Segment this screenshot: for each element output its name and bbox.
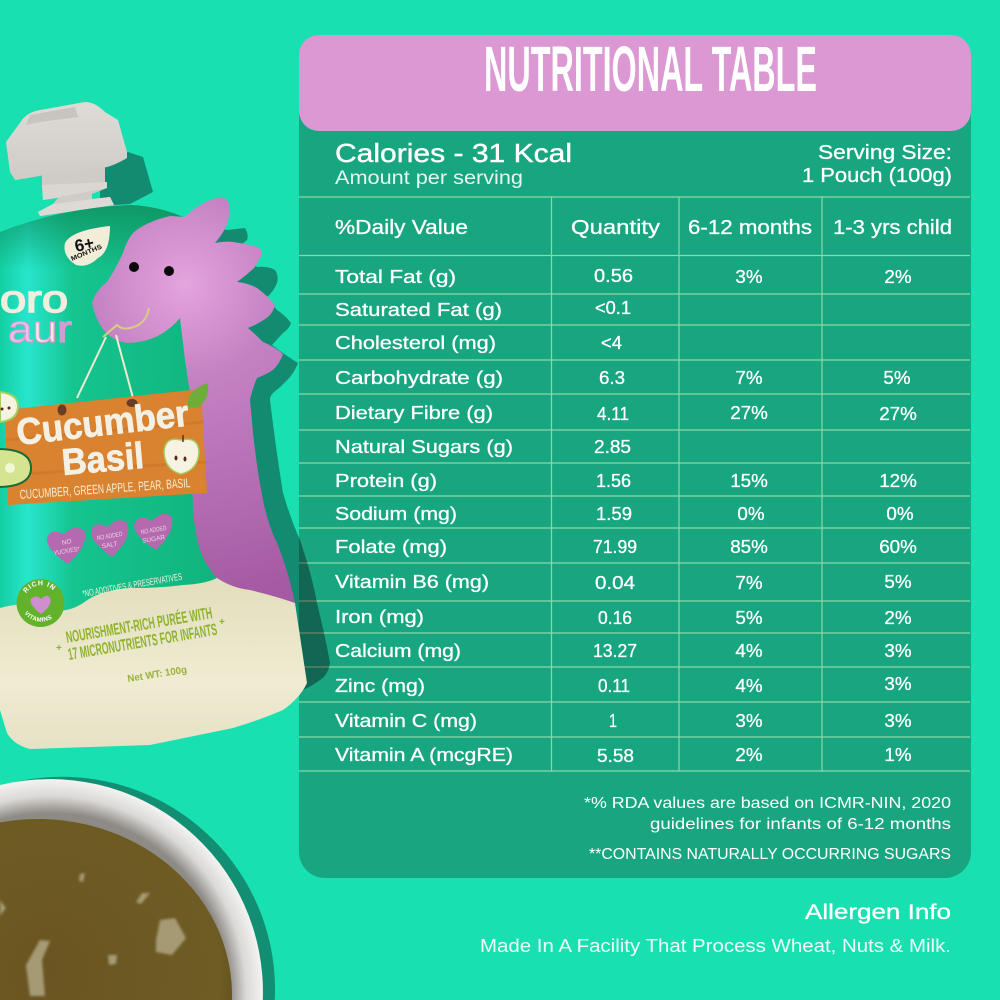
- quantity column: <0.1: [595, 297, 631, 318]
- bowl of puree: [0, 777, 275, 1000]
- column headers: Quantity: [571, 217, 660, 239]
- nutrient names: Vitamin A (mcgRE): [335, 744, 513, 765]
- ingredients: CUCUMBER, GREEN APPLE, PEAR, BASIL: [19, 475, 191, 502]
- quantity column: 5.58: [597, 745, 634, 766]
- vitamins badge: [16, 579, 64, 627]
- quantity column: 1: [609, 710, 617, 731]
- spout neck: [38, 160, 114, 216]
- net weight: Net WT: 100g: [127, 665, 188, 685]
- dino smile: [103, 308, 149, 337]
- nourishment claim: NOURISHMENT-RICH PURÉE WITH: [64, 603, 214, 647]
- nutrient names: Natural Sugars (g): [335, 436, 513, 457]
- hanging rope: [77, 335, 133, 398]
- nourishment claim: +: [219, 617, 225, 628]
- quantity column: 0.11: [598, 675, 630, 696]
- quantity column: [593, 265, 637, 766]
- amount per serving: Amount per serving: [335, 167, 523, 189]
- column headers: %Daily Value: [335, 217, 468, 239]
- bowl shadow: [0, 777, 275, 1000]
- nourishment claim: 17 MICRONUTRIENTS FOR INFANTS: [67, 621, 219, 664]
- heart: no added sugar: [134, 514, 172, 550]
- nutrient names: Cholesterol (mg): [335, 332, 496, 353]
- quantity column: 13.27: [593, 640, 637, 661]
- puree highlights: [0, 873, 186, 996]
- serving size: Serving Size:: [818, 142, 952, 164]
- vitamins badge: VITAMINS: [25, 610, 52, 622]
- 6-12 months column: 7%: [735, 572, 763, 593]
- 1-3 yrs child column: 60%: [879, 536, 917, 557]
- column headers: [335, 217, 952, 239]
- cream base: [0, 578, 307, 749]
- quantity column: 1.59: [596, 503, 632, 524]
- nutrient names: Total Fat (g): [335, 266, 456, 287]
- allergen info: [480, 901, 951, 956]
- quantity column: 0.16: [598, 607, 632, 628]
- heart: no added sugar: SUGAR: [142, 534, 166, 545]
- no additives note: *NO ADDITIVES & PRESERVATIVES: [82, 572, 183, 600]
- 1-3 yrs child column: 3%: [884, 673, 912, 694]
- serving size: 1 Pouch (100g): [802, 165, 952, 187]
- pouch: [0, 102, 307, 749]
- nutrient names: Vitamin C (mg): [335, 710, 477, 731]
- bowl rim: [0, 779, 263, 1000]
- 1-3 yrs child column: 5%: [884, 571, 912, 592]
- puree: [0, 819, 232, 1000]
- quantity column: 6.3: [599, 367, 625, 388]
- 6-12 months column: 0%: [737, 503, 765, 524]
- months badge: 6+: [73, 233, 96, 256]
- 1-3 yrs child column: 2%: [884, 607, 912, 628]
- 6-12 months column: [730, 266, 768, 765]
- quantity column: 0.04: [595, 572, 635, 593]
- 1-3 yrs child column: 12%: [879, 470, 917, 491]
- 1-3 yrs child column: 1%: [884, 744, 912, 765]
- column headers: 6-12 months: [688, 217, 812, 239]
- brand logo: oro: [0, 279, 68, 321]
- nutrient names: Iron (mg): [335, 606, 424, 627]
- heart: no yuckies: YUCKIES*: [53, 546, 81, 557]
- 6-12 months column: 3%: [735, 710, 763, 731]
- heart: no added salt: SALT: [101, 541, 118, 550]
- 1-3 yrs child column: 3%: [884, 710, 912, 731]
- wooden sign: Basil: [60, 435, 145, 483]
- footnotes: **CONTAINS NATURALLY OCCURRING SUGARS: [589, 846, 951, 863]
- quantity column: 4.11: [597, 403, 629, 424]
- 1-3 yrs child column: 27%: [879, 403, 917, 424]
- 1-3 yrs child column: 5%: [883, 367, 911, 388]
- nutrient names: Carbohydrate (g): [335, 367, 503, 388]
- heart: no yuckies: NO: [61, 538, 72, 547]
- heart: no added sugar: NO ADDED: [140, 525, 167, 536]
- apple slice: [0, 392, 18, 422]
- dino character: [92, 198, 295, 603]
- quantity column: 2.85: [594, 436, 631, 457]
- sign nails: [58, 404, 66, 416]
- months badge: [64, 226, 110, 266]
- apple icon: [164, 435, 199, 474]
- claim hearts: [47, 514, 172, 564]
- 6-12 months column: 27%: [730, 402, 768, 423]
- pouch cap: [6, 102, 127, 216]
- table grid: [299, 197, 970, 771]
- 6-12 months column: 5%: [735, 607, 763, 628]
- nutrient names: Zinc (mg): [335, 675, 425, 696]
- quantity column: 0.56: [594, 265, 633, 286]
- nutrient names: Saturated Fat (g): [335, 299, 502, 320]
- 1-3 yrs child column: 2%: [884, 266, 912, 287]
- footnotes: [584, 795, 951, 863]
- nutrient names: Dietary Fibre (g): [335, 402, 493, 423]
- nutrient names: Protein (g): [335, 470, 437, 491]
- cucumber slice: [0, 449, 31, 487]
- allergen info: Made In A Facility That Process Wheat, Nuts & Milk.: [480, 936, 951, 956]
- heart: no yuckies: [47, 528, 85, 564]
- quantity column: <4: [601, 332, 622, 353]
- nourishment claim: [56, 603, 225, 664]
- pouch green body: [0, 205, 240, 625]
- nutrient names: Sodium (mg): [335, 503, 457, 524]
- nourishment claim: +: [56, 643, 62, 654]
- leaf: [188, 383, 208, 408]
- 6-12 months column: 2%: [735, 744, 763, 765]
- brand logo: [0, 279, 72, 351]
- 1-3 yrs child column: 0%: [886, 503, 914, 524]
- flavour name: Cucumber: [14, 393, 191, 453]
- 6-12 months column: 4%: [735, 640, 763, 661]
- nutrient names: Folate (mg): [335, 536, 447, 557]
- months badge: MONTHS: [70, 243, 104, 263]
- 6-12 months column: 7%: [735, 367, 763, 388]
- 6-12 months column: 85%: [730, 536, 768, 557]
- quantity column: 71.99: [593, 536, 637, 557]
- serving size: [802, 142, 952, 187]
- pouch shadow: [100, 152, 330, 695]
- allergen info: Allergen Info: [805, 901, 951, 924]
- column headers: 1-3 yrs child: [833, 217, 952, 239]
- heart: no added salt: NO ADDED: [96, 531, 123, 542]
- nutrient names: [335, 266, 513, 765]
- table panel background: [299, 35, 971, 878]
- nutrient names: Calcium (mg): [335, 640, 461, 661]
- panel: nutritional table: [299, 33, 971, 878]
- 1-3 yrs child column: 3%: [884, 640, 912, 661]
- cap top: [6, 102, 127, 180]
- footnotes: guidelines for infants of 6-12 months: [650, 816, 951, 833]
- heading band: [299, 33, 971, 131]
- footnotes: *% RDA values are based on ICMR-NIN, 2020: [584, 795, 951, 812]
- wooden sign: [0, 383, 208, 505]
- brand logo: aur: [8, 309, 72, 351]
- dino eyes: [129, 262, 139, 272]
- calories: Calories - 31 Kcal: [335, 138, 572, 168]
- nutrient names: Vitamin B6 (mg): [335, 571, 489, 592]
- 1-3 yrs child column: [879, 266, 917, 765]
- quantity column: 1.56: [596, 470, 631, 491]
- vitamins badge: RICH IN: [22, 580, 56, 593]
- 6-12 months column: 3%: [735, 266, 763, 287]
- 6-12 months column: 4%: [735, 675, 763, 696]
- 6-12 months column: 15%: [730, 470, 768, 491]
- heart: no added salt: [91, 520, 128, 557]
